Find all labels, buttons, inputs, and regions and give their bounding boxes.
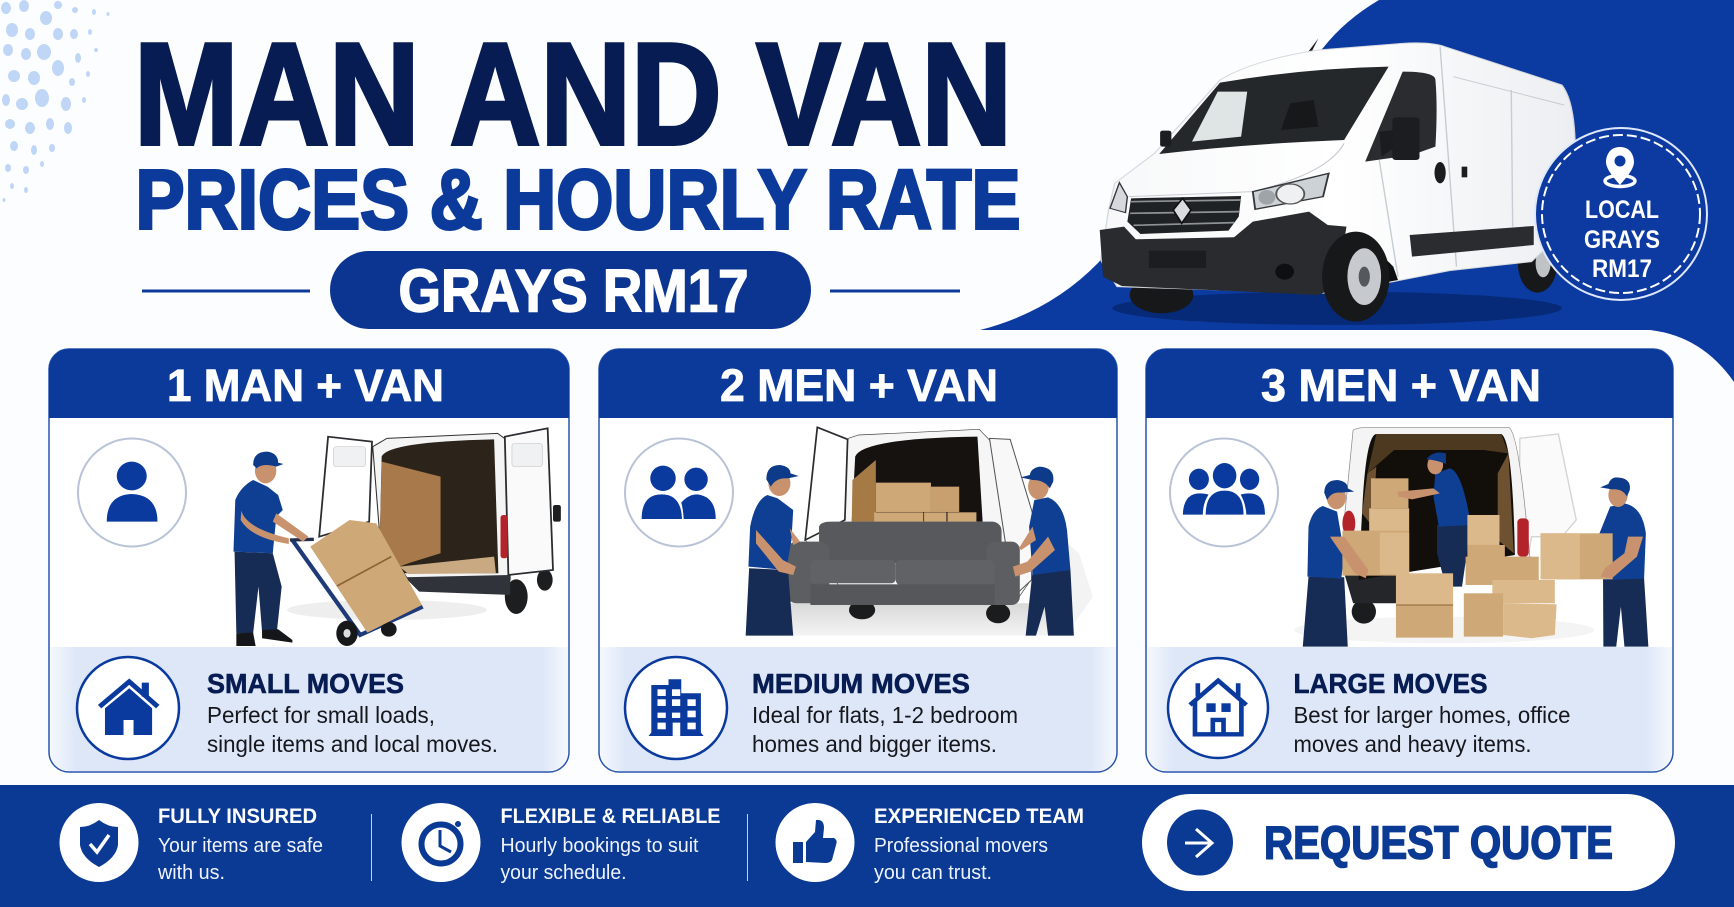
icon: arrow xyxy=(1185,829,1212,857)
panel: 2 men + van xyxy=(599,349,1117,772)
moves info strip xyxy=(600,647,1116,771)
icon: large house xyxy=(1168,658,1268,758)
location pill: Grays RM17 xyxy=(142,251,960,329)
van illustration xyxy=(1100,38,1575,325)
badge: local Grays RM17: LOCAL xyxy=(1585,196,1659,224)
feature: experienced team xyxy=(776,803,1084,884)
icon: small house xyxy=(77,657,179,759)
icon: apartment block xyxy=(625,657,727,759)
card header xyxy=(49,349,569,418)
badge: local Grays RM17: RM17 xyxy=(1592,255,1652,283)
background dots xyxy=(1,0,110,202)
feature: fully insured: Your items are safe xyxy=(158,835,323,857)
feature: flexible and reliable xyxy=(402,803,720,884)
text: small moves: Perfect for small loads, xyxy=(207,702,435,728)
blue hero background shape xyxy=(980,0,1734,382)
feature: experienced team: Professional movers xyxy=(874,835,1048,857)
card header xyxy=(599,349,1117,418)
text: small moves: SMALL MOVES xyxy=(207,668,404,699)
button: request quote: REQUEST QUOTE xyxy=(1264,816,1613,868)
footer bar xyxy=(0,785,1734,907)
text: medium moves xyxy=(752,668,1018,757)
feature: experienced team: EXPERIENCED TEAM xyxy=(874,805,1084,828)
icon: single person xyxy=(78,438,186,546)
feature: flexible and reliable: your schedule. xyxy=(500,862,626,884)
icon: two people xyxy=(625,438,733,546)
text: medium moves: homes and bigger items. xyxy=(752,731,997,757)
panel: 1 man + van xyxy=(49,349,569,772)
feature: experienced team: you can trust. xyxy=(874,862,992,884)
text: large moves xyxy=(1294,668,1570,757)
feature: fully insured: FULLY INSURED xyxy=(158,805,317,828)
feature: flexible and reliable: Hourly bookings to suit xyxy=(500,835,699,857)
moves info strip xyxy=(1147,647,1672,771)
scene: two men carrying sofa xyxy=(746,427,1093,636)
scene: three men loading boxes xyxy=(1294,427,1648,647)
feature: flexible and reliable: FLEXIBLE & RELIABLE xyxy=(500,805,720,828)
feature: fully insured: with us. xyxy=(157,862,225,884)
badge: local Grays RM17: GRAYS xyxy=(1584,226,1660,254)
text: small moves: single items and local moves. xyxy=(207,731,498,757)
subtitle: prices and hourly rate: PRICES & HOURLY RATE xyxy=(136,152,1020,246)
feature: fully insured xyxy=(60,803,323,884)
button: request quote xyxy=(1142,794,1675,891)
text: medium moves: MEDIUM MOVES xyxy=(752,668,970,699)
text: large moves: moves and heavy items. xyxy=(1294,731,1532,757)
moves info strip xyxy=(50,647,568,771)
scene: man with hand truck at van xyxy=(233,428,561,646)
text: small moves xyxy=(207,668,498,757)
card header xyxy=(1146,349,1673,418)
text: large moves: Best for larger homes, office xyxy=(1294,702,1570,728)
panel: 1 man + van: 1 MAN + VAN xyxy=(167,360,444,411)
panel: 3 men + van: 3 MEN + VAN xyxy=(1261,360,1541,411)
panel: 2 men + van: 2 MEN + VAN xyxy=(720,360,998,411)
icon: three people xyxy=(1170,438,1278,546)
icon: location pin xyxy=(1605,147,1635,186)
badge: local Grays RM17 xyxy=(1535,128,1707,300)
text: large moves: LARGE MOVES xyxy=(1294,668,1488,699)
location pill: Grays RM17: GRAYS RM17 xyxy=(398,258,748,324)
title: man and van: MAN AND VAN xyxy=(134,13,1012,175)
panel: 3 men + van xyxy=(1146,349,1673,772)
text: medium moves: Ideal for flats, 1-2 bedroom xyxy=(752,702,1018,728)
